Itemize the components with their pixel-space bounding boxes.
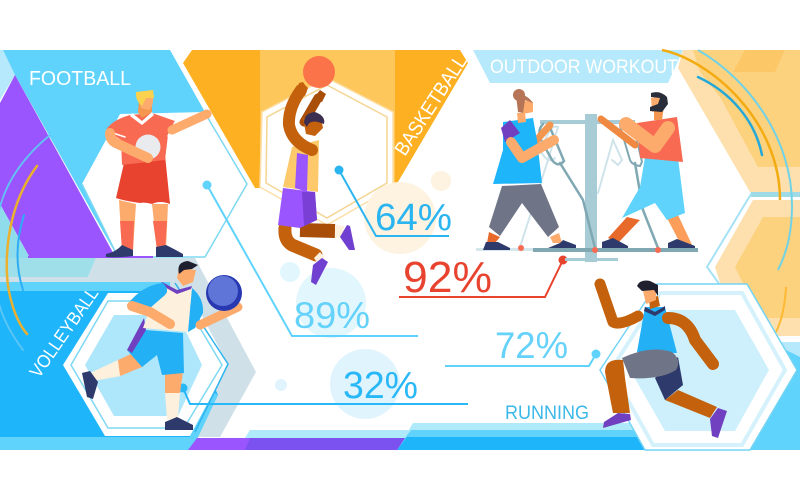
figure: exercise machine bbox=[476, 114, 698, 262]
statistic: 64%: 64% bbox=[375, 197, 452, 239]
panel: basketball background bbox=[183, 50, 468, 225]
heading: basketball: BASKETBALL bbox=[391, 51, 472, 160]
connector: football 89% bbox=[202, 180, 418, 336]
figure: volleyball player bbox=[82, 261, 242, 430]
connector: volleyball 32% bbox=[178, 384, 468, 404]
panel: outdoor workout background bbox=[473, 50, 800, 336]
statistic: 32%: 32% bbox=[343, 365, 418, 407]
connector: basketball 64% bbox=[334, 166, 449, 236]
figure: basketball player bbox=[278, 56, 355, 285]
statistic: 72%: 72% bbox=[495, 325, 568, 366]
panel: bottom strips bbox=[188, 423, 650, 450]
panel: volleyball background bbox=[0, 258, 256, 450]
heading: volleyball: VOLLEYBALL bbox=[25, 283, 103, 381]
statistic: 89%: 89% bbox=[294, 295, 370, 336]
statistic: 92%: 92% bbox=[403, 253, 492, 302]
heading: football: FOOTBALL bbox=[29, 68, 131, 90]
panel: running background bbox=[600, 284, 800, 450]
panel: football background bbox=[0, 50, 247, 258]
heading: running: RUNNING bbox=[505, 403, 589, 424]
figure: woman on machine bbox=[483, 89, 576, 250]
figure: football player bbox=[106, 90, 207, 257]
decorative circles bbox=[275, 171, 451, 419]
left decorative arcs bbox=[0, 135, 50, 350]
figure: man on machine bbox=[601, 92, 695, 248]
heading: outdoor workout: OUTDOOR WORKOUT bbox=[490, 56, 678, 78]
connector: running 72% bbox=[445, 350, 600, 366]
figure: runner bbox=[600, 281, 727, 438]
connector: outdoor workout 92% bbox=[399, 256, 568, 297]
